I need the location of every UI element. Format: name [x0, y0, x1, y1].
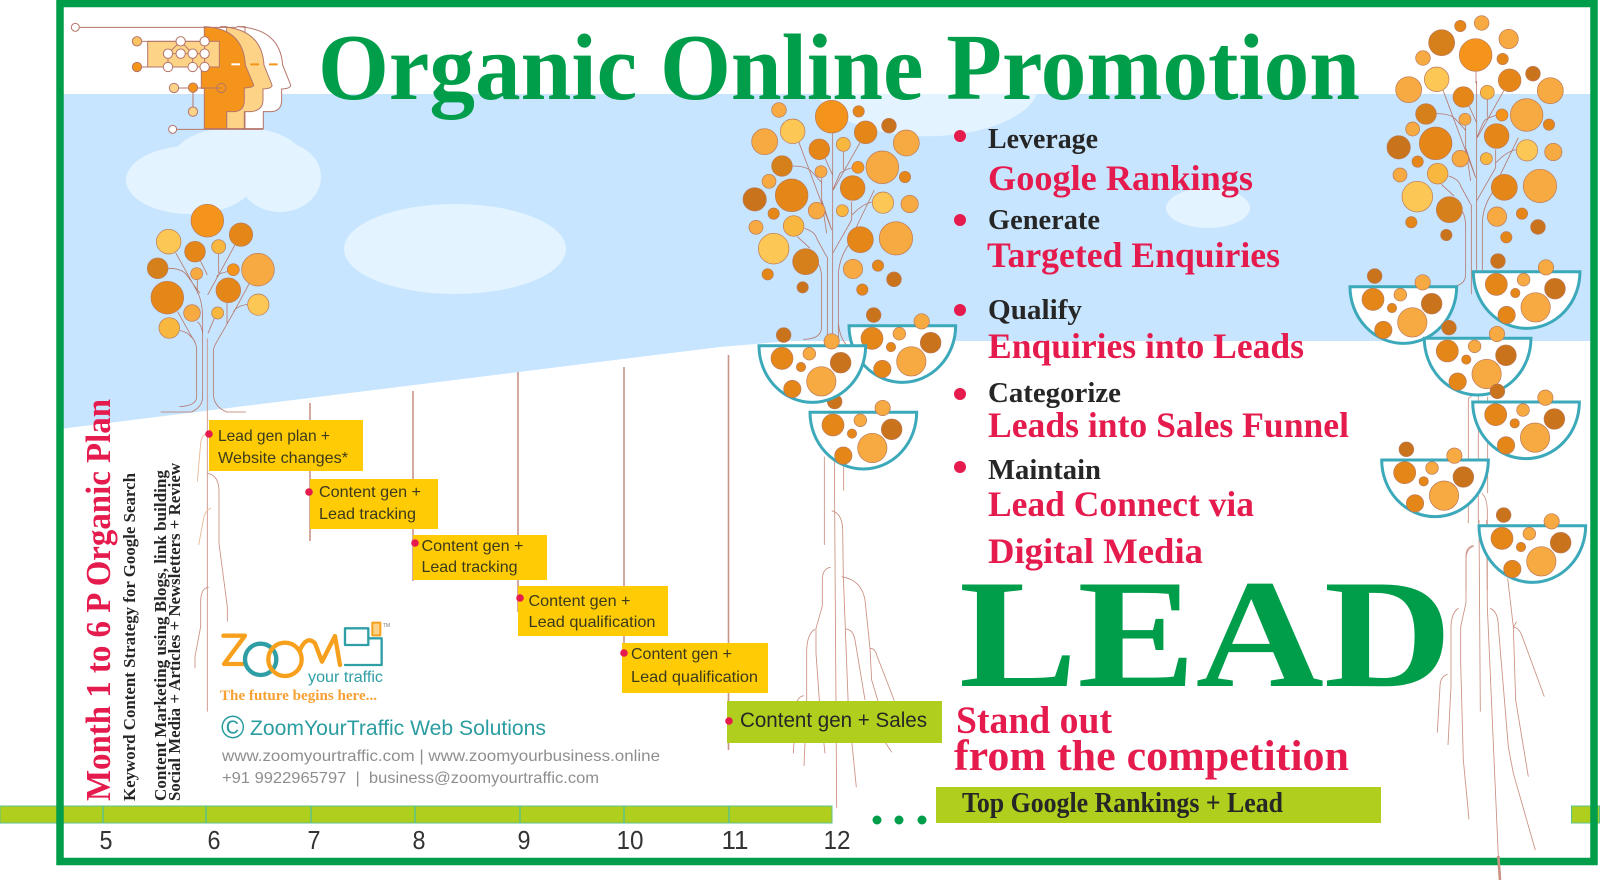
step 2 box: Lead tracking [319, 506, 416, 523]
timeline month numbers: 7 [308, 825, 320, 855]
bullet: maintain lead connect: Maintain [988, 455, 1101, 486]
sky background [60, 94, 1592, 429]
bullet: leverage google rankings: Leverage [988, 124, 1098, 155]
step 6 box: Content gen + Sales [740, 709, 927, 732]
timeline month numbers: 9 [518, 825, 530, 855]
bullet: leverage google rankings: Google Rankings [988, 158, 1253, 198]
banner: top google rankings [936, 787, 1381, 823]
step 5 box [620, 643, 768, 693]
step 2 box: Content gen + [319, 484, 421, 501]
logo: zoom your traffic [220, 623, 390, 704]
timeline bar [0, 806, 1600, 823]
company name: ZoomYourTraffic Web Solutions [250, 717, 546, 740]
bullet: generate targeted enquiries: Generate [988, 205, 1100, 236]
content marketing line: Content Marketing using Blogs, link building [151, 470, 170, 801]
step 3 box: Content gen + [422, 538, 524, 555]
heading: month 1 to 6 plan: Month 1 to 6 P Organic Plan [79, 399, 118, 801]
step 1 box [205, 420, 363, 471]
timeline month numbers: 10 [616, 825, 644, 855]
bullet list [954, 124, 1349, 571]
step 5 box: Lead qualification [631, 669, 758, 686]
logo: zoom your traffic: TM [383, 623, 390, 629]
timeline month numbers: 12 [824, 825, 850, 855]
step 4 box: Lead qualification [528, 614, 656, 631]
step 5 box: Content gen + [631, 646, 732, 663]
step 1 box: Lead gen plan + [218, 428, 330, 445]
tagline: from the competition [954, 733, 1349, 780]
timeline month numbers [100, 825, 850, 855]
step 4 box [516, 586, 668, 636]
clouds [126, 94, 1250, 294]
tagline: Stand out [956, 699, 1112, 742]
rotated plan text [79, 399, 184, 801]
hanging bowls of middle tree [759, 308, 956, 469]
bullet: categorize leads into sales funnel [954, 378, 1349, 445]
bullet: qualify enquiries into leads [954, 295, 1304, 366]
big tree roots [793, 457, 894, 808]
right root below frame [1498, 856, 1500, 880]
timeline month numbers: 5 [100, 825, 112, 855]
tagline [954, 699, 1349, 780]
bullet: maintain lead connect: Digital Media [988, 531, 1203, 571]
bullet: leverage google rankings [954, 124, 1253, 198]
bullet: categorize leads into sales funnel: Categorize [988, 378, 1121, 409]
company name: © [221, 709, 245, 745]
right tree roots [1437, 397, 1544, 880]
step 4 box: Content gen + [528, 593, 630, 610]
bullet: maintain lead connect [954, 455, 1254, 571]
company name [221, 709, 546, 745]
banner: top google rankings: Top Google Rankings + Lead [962, 788, 1283, 819]
timeline step stems [310, 355, 728, 750]
contact details: www.zoomyourtraffic.com | www.zoomyourbusiness.online [221, 748, 660, 765]
bullet: qualify enquiries into leads: Qualify [988, 295, 1082, 326]
step 1 box: Website changes* [218, 450, 348, 467]
small tree [147, 204, 274, 412]
big word LEAD: LEAD [959, 548, 1452, 720]
title: Organic Online Promotion [318, 16, 1360, 120]
timeline month numbers: 11 [722, 825, 748, 855]
ellipsis dots [872, 816, 926, 824]
step 6 box [725, 701, 942, 743]
timeline month numbers: 6 [208, 825, 220, 855]
icon: layered heads with network [71, 23, 291, 133]
bullet: maintain lead connect: Lead Connect via [988, 484, 1254, 524]
bullet: qualify enquiries into leads: Enquiries into Leads [988, 326, 1304, 366]
logo: zoom your traffic: The future begins here... [220, 688, 377, 704]
bullet: generate targeted enquiries: Targeted Enquiries [987, 235, 1280, 275]
step 3 box: Lead tracking [422, 559, 518, 576]
hanging bowls of right tree [1350, 254, 1586, 582]
bullet: categorize leads into sales funnel: Leads into Sales Funnel [988, 405, 1349, 445]
step 2 box [305, 479, 438, 529]
bullet: generate targeted enquiries [954, 205, 1280, 275]
small tree trunk and roots [195, 338, 227, 712]
social media line: Social Media + Articles + Newsletters + Review [165, 462, 184, 801]
logo: zoom your traffic: your traffic [308, 669, 383, 686]
timeline month numbers: 8 [412, 825, 426, 855]
big tree in middle [743, 100, 919, 347]
strategy line: Keyword Content Strategy for Google Search [120, 472, 139, 801]
step 3 box [411, 535, 547, 580]
contact details: +91 9922965797 | business@zoomyourtraffic.com [222, 770, 599, 787]
contact details [221, 748, 660, 787]
right tree [1387, 16, 1563, 294]
